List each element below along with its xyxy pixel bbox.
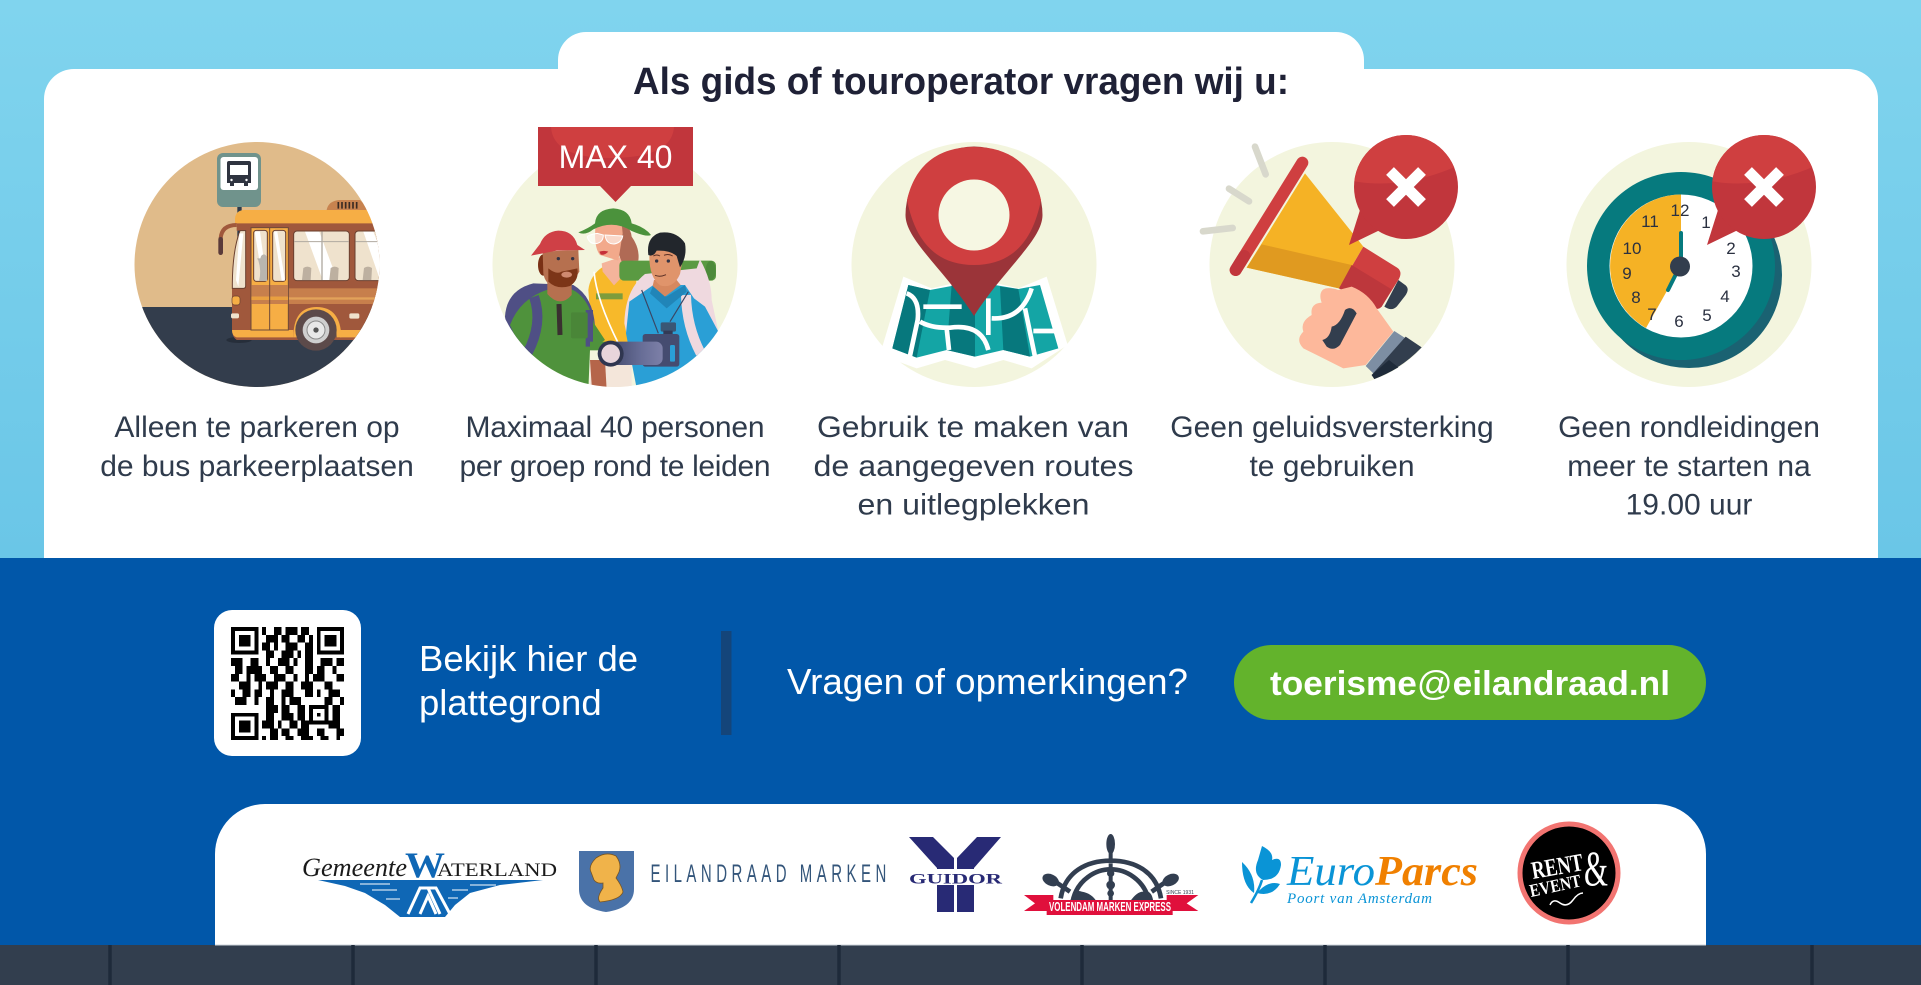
icon: clock: 12 [1671,201,1689,220]
icon: group of tourists [492,170,738,387]
logo: Rent & Event [1520,824,1618,922]
label: time limit: 19.00 uur [1626,488,1752,522]
logo: Rent & Event: RENT [1529,849,1585,885]
icon: clock: 5 [1702,306,1712,325]
icon: red cross bubble [1349,135,1458,245]
text: map link: plattegrond [419,682,602,723]
icon: clock: 8 [1631,288,1641,307]
label: amplification: Geen geluidsversterking [1170,411,1494,444]
logo: EuroParcs: Poort van Amsterdam [1286,891,1432,907]
logo: Eilandraad Marken [579,851,886,912]
text: questions: Vragen of opmerkingen? [787,661,1188,702]
label: parking [100,411,414,483]
label: routes: en uitlegplekken [858,488,1090,522]
logo: Gemeente Waterland: ATERLAND [437,860,557,881]
label: parking: Alleen te parkeren op [114,411,400,444]
title: Als gids of touroperator vragen wij u: [633,61,1289,103]
icon: clock [1566,142,1812,387]
logo: EuroParcs: Parcs [1374,849,1478,895]
white panel with title tab [44,32,1878,558]
right man [624,260,718,332]
logo: Guidor: GUIDOR [909,872,1002,888]
icon: clock: 11 [1641,212,1659,231]
label: routes: Gebruik te maken van [817,411,1129,444]
icon: bus at bus stop [130,140,388,392]
logo: Eilandraad Marken: EILANDRAAD MARKEN [650,860,886,888]
text: map link [419,638,638,723]
label: group size: per groep rond te leiden [460,450,770,483]
icon: clock: 1 [1701,213,1711,232]
blue band [0,558,1921,948]
callout: MAX 40 [538,127,693,202]
icon: clock: 2 [1726,239,1736,258]
label: amplification [1170,411,1494,483]
woman [588,267,637,350]
label: group size [460,411,770,483]
icon: clock: 9 [1622,264,1632,283]
icon: clock: 10 [1623,239,1641,258]
logo: Volendam Marken Express [1024,834,1198,915]
bag [590,364,632,387]
left man [505,283,595,350]
camera [661,322,676,332]
email pill [1234,645,1706,720]
label: routes: de aangegeven routes [814,450,1134,483]
label: amplification: te gebruiken [1249,450,1415,483]
logo: Rent & Event: EVENT [1528,871,1583,901]
footer bar [0,944,1921,985]
logo: Guidor [907,837,1004,912]
icon: clock: 4 [1720,287,1730,306]
logo: EuroParcs: Euro [1286,849,1375,895]
logo: Gemeente Waterland: W [405,845,445,885]
label: group size: Maximaal 40 personen [466,411,764,444]
icon: clock: 3 [1731,262,1741,281]
label: routes [814,411,1134,522]
QR code [214,610,361,756]
logo: Gemeente Waterland: Gemeente [302,853,407,882]
label: parking: de bus parkeerplaatsen [100,450,414,483]
icon: clock: 6 [1674,312,1684,331]
logo: Volendam Marken Express: VOLENDAM MARKEN EXPRESS [1049,899,1171,914]
text: map link: Bekijk hier de [419,638,638,679]
logo: Volendam Marken Express: SINCE 1931 [1166,890,1194,896]
label: time limit: meer te starten na [1567,450,1811,483]
logos panel [215,804,1706,945]
icon: megaphone with cross [1203,142,1454,387]
divider [721,631,732,735]
email pill: toerisme@eilandraad.nl [1270,665,1670,703]
roll [619,261,716,281]
label: time limit: Geen rondleidingen [1558,411,1820,444]
icon: red cross bubble on clock [1707,135,1816,245]
icon: map with location pin [852,142,1096,387]
sky background [0,0,1921,560]
icon: clock: 7 [1647,305,1657,324]
logo: EuroParcs [1242,846,1478,907]
icon: bus stop sign [217,153,261,207]
callout: MAX 40: MAX 40 [559,139,672,175]
logo: Rent & Event: & [1584,840,1608,896]
logo: Gemeente Waterland [302,845,557,917]
label: time limit [1558,411,1820,522]
